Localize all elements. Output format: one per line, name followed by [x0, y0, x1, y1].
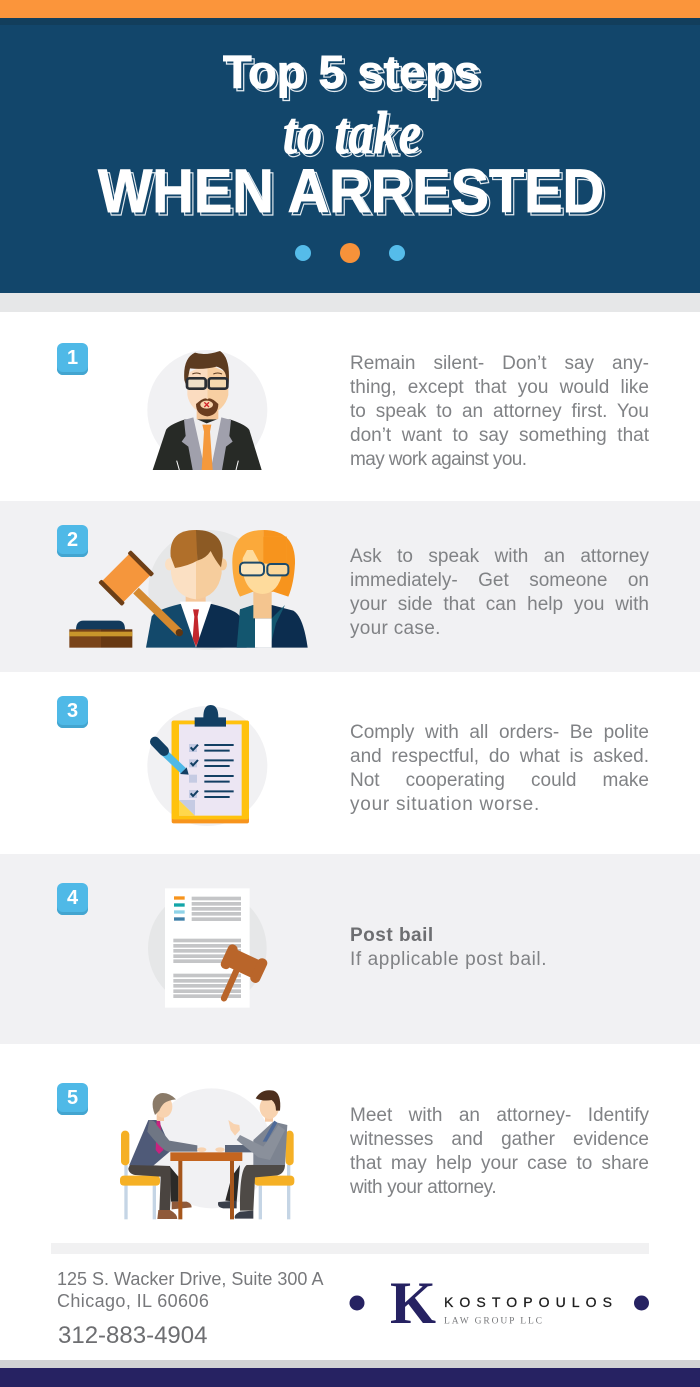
text 5: that may help your case to share: [350, 1153, 649, 1174]
text 1: Remain silent- Don’t say any-: [350, 353, 649, 374]
panel: step 4: [0, 854, 700, 1044]
text 1: thing, except that you would like: [350, 377, 649, 398]
text 3: [350, 722, 649, 815]
icon: clipboard checklist: [148, 705, 268, 826]
address: 125 S. Wacker Drive, Suite 300 A: [57, 1269, 323, 1289]
text 4: [350, 925, 547, 970]
footer divider bar: [51, 1243, 649, 1254]
text 4: Post bail: [350, 925, 434, 946]
address: [57, 1269, 324, 1311]
title: Top 5 steps: [223, 46, 480, 98]
panel: step 3: [0, 672, 700, 854]
text 4: If applicable post bail.: [350, 949, 547, 970]
logo: Kostopoulos Law Group: KOSTOPOULOS: [444, 1294, 612, 1310]
text 5: with your attorney.: [350, 1177, 496, 1198]
header shadow strip: [0, 18, 700, 25]
text 1: to speak to an attorney first. You: [350, 401, 649, 422]
badge 3: 3: [67, 700, 78, 722]
text 3: Not cooperating could make: [350, 770, 649, 791]
title: WHEN ARRESTED: [101, 160, 607, 228]
text 2: your side that can help you with: [350, 594, 649, 615]
title: to take: [286, 103, 424, 169]
badge 1: 1: [67, 347, 78, 369]
icon: document with gavel: [148, 888, 268, 1008]
header panel: [0, 18, 700, 293]
badge 4: [57, 883, 88, 915]
text 1: [350, 353, 649, 470]
title: WHEN ARRESTED: [98, 157, 604, 225]
panel: step 1: [0, 312, 700, 501]
icon: silent man: [148, 350, 268, 470]
badge 1: [57, 343, 88, 375]
panel: step 5: [0, 1044, 700, 1360]
text 5: witnesses and gather evidence: [350, 1129, 649, 1150]
text 1: may work against you.: [350, 449, 526, 470]
text 2: Ask to speak with an attorney: [350, 546, 649, 567]
bottom grey strip: [0, 1360, 700, 1368]
icon: gavel and attorneys: [69, 530, 308, 650]
text 1: don’t want to say something that: [350, 425, 649, 446]
badge 4: 4: [67, 887, 78, 909]
text 2: [350, 546, 649, 639]
text 3: Comply with all orders- Be polite: [350, 722, 649, 743]
title: to take: [283, 100, 421, 166]
title: [98, 46, 607, 228]
icon: client and attorney meeting: [120, 1088, 294, 1220]
address: Chicago, IL 60606: [57, 1291, 209, 1311]
text 5: [350, 1105, 649, 1198]
dots: [295, 243, 405, 263]
text 5: Meet with an attorney- Identify: [350, 1105, 649, 1126]
text 3: your situation worse.: [350, 794, 540, 815]
text 2: your case.: [350, 618, 441, 639]
title: Top 5 steps: [226, 49, 483, 101]
badge 2: 2: [67, 529, 78, 551]
badge 5: 5: [67, 1087, 78, 1109]
text 3: and respectful, do what is asked.: [350, 746, 649, 767]
badge 2: [57, 525, 88, 557]
grey separator: [0, 293, 700, 312]
top orange bar: [0, 0, 700, 18]
logo: Kostopoulos Law Group: LAW GROUP LLC: [444, 1316, 542, 1326]
badge 5: [57, 1083, 88, 1115]
text 2: immediately- Get someone on: [350, 570, 649, 591]
panel: step 2: [0, 501, 700, 672]
badge 3: [57, 696, 88, 728]
bottom navy bar: [0, 1368, 700, 1387]
phone: 312-883-4904: [58, 1322, 207, 1349]
logo: Kostopoulos Law Group: [350, 1279, 649, 1329]
